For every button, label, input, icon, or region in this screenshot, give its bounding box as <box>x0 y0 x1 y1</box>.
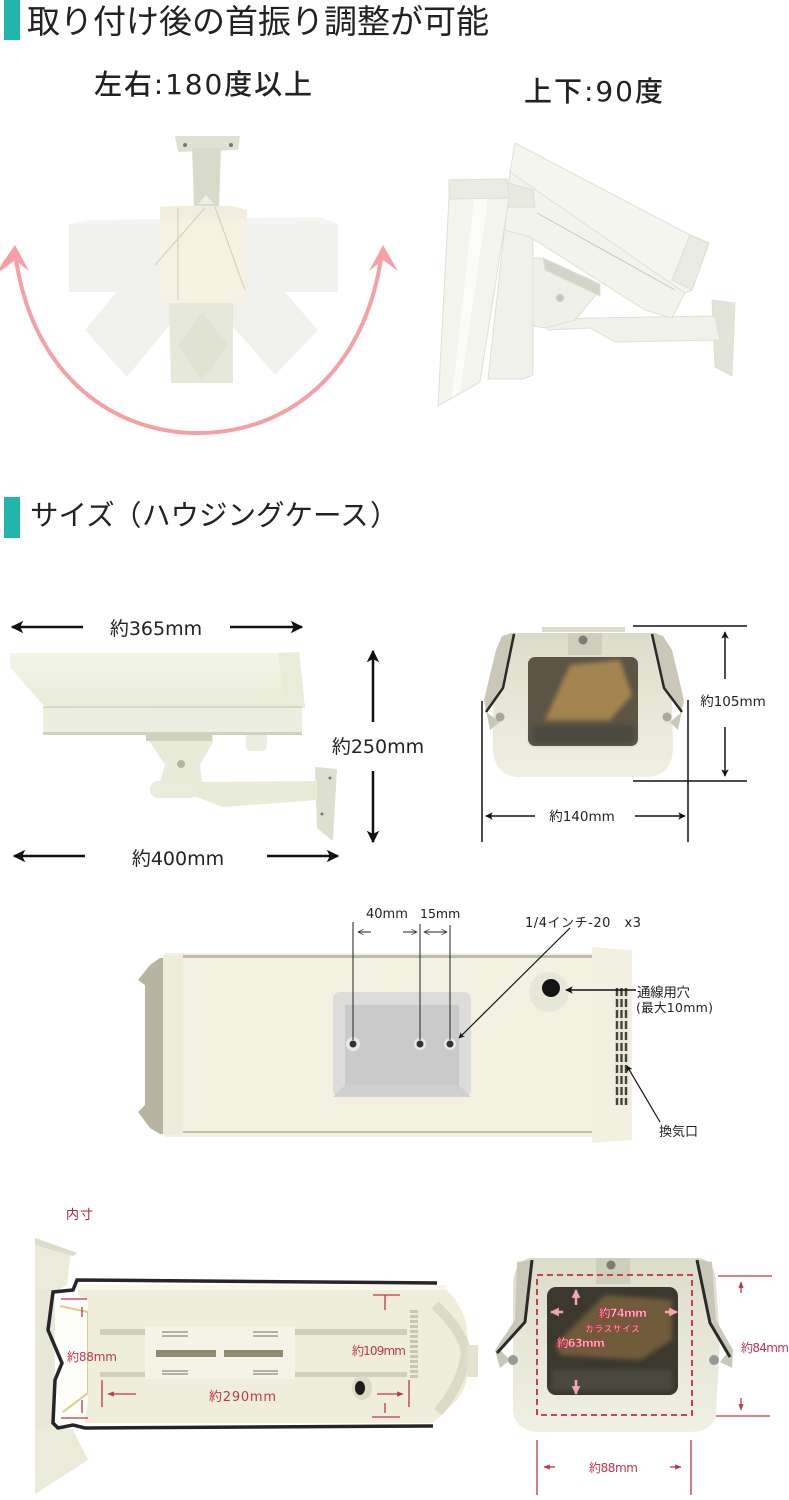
dimension: 140mm width: 約140mm <box>549 809 615 825</box>
inner dimension annotations on opened housing: 約88mm <box>67 1349 117 1364</box>
dimension: hole spacing 40mm and 15mm: 40mm <box>366 907 408 922</box>
callout: 1/4 inch-20 x3: 1/4インチ-20 x3 <box>525 916 641 931</box>
heading: size of housing case: サイズ <box>30 500 115 532</box>
camera rotating left-right with ghost positions <box>69 136 338 383</box>
callout: wiring hole: 通線用穴 <box>637 985 690 1001</box>
opened housing interior view <box>35 1238 478 1494</box>
callout: ventilation opening: 換気口 <box>659 1124 698 1140</box>
camera housing side view <box>10 652 337 841</box>
housing front view with glass <box>495 1258 733 1432</box>
label: inner dimensions: 内寸 <box>66 1207 93 1223</box>
inner dimension annotations on opened housing <box>61 1295 409 1418</box>
dimension: 105mm height: 約105mm <box>700 694 766 710</box>
dimension: 88mm width <box>537 1440 691 1495</box>
dimension: 250mm height: 約250mm <box>332 736 424 758</box>
inner dimension annotations on opened housing: 約290mm <box>209 1390 276 1405</box>
pink rotation arc arrow <box>0 245 398 433</box>
glass size overlay with dashed outline: 約74mm <box>599 1306 647 1320</box>
dimension: 88mm width: 約88mm <box>589 1460 638 1475</box>
heading: size of housing case <box>4 497 399 538</box>
camera housing front view <box>484 627 684 777</box>
dimension: 365mm width: 約365mm <box>110 618 202 640</box>
heading: adjustment after installation: 取り付け後の首振り調整が可能 <box>27 3 489 40</box>
dimension: 84mm height: 約84mm <box>741 1340 789 1355</box>
dimension: 84mm height <box>716 1276 789 1416</box>
inner dimension annotations on opened housing: 約109mm <box>352 1343 406 1358</box>
label: left-right 180 degrees: 左右:180度以上 <box>94 68 312 101</box>
dimension: 400mm width: 約400mm <box>132 848 224 870</box>
dimension: hole spacing 40mm and 15mm: 15mm <box>420 906 460 921</box>
callout: wiring hole: (最大10mm) <box>636 1000 713 1015</box>
callout: 1/4 inch-20 x3 <box>459 916 641 1038</box>
heading: size of housing case: ハウジングケース <box>142 500 369 532</box>
callout: wiring hole <box>566 985 713 1015</box>
camera tilted up-down side view <box>438 143 735 406</box>
dimension: hole spacing 40mm and 15mm <box>353 906 460 1040</box>
camera housing underside view <box>138 947 632 1143</box>
label: up-down 90 degrees: 上下:90度 <box>524 75 663 108</box>
glass size overlay with dashed outline: ガラスサイズ <box>585 1323 640 1335</box>
glass size overlay with dashed outline: 約63mm <box>557 1336 605 1350</box>
heading: size of housing case: ） <box>370 500 399 532</box>
callout: ventilation opening <box>627 1066 698 1140</box>
heading: size of housing case: （ <box>113 500 142 532</box>
glass size overlay with dashed outline <box>537 1275 692 1415</box>
